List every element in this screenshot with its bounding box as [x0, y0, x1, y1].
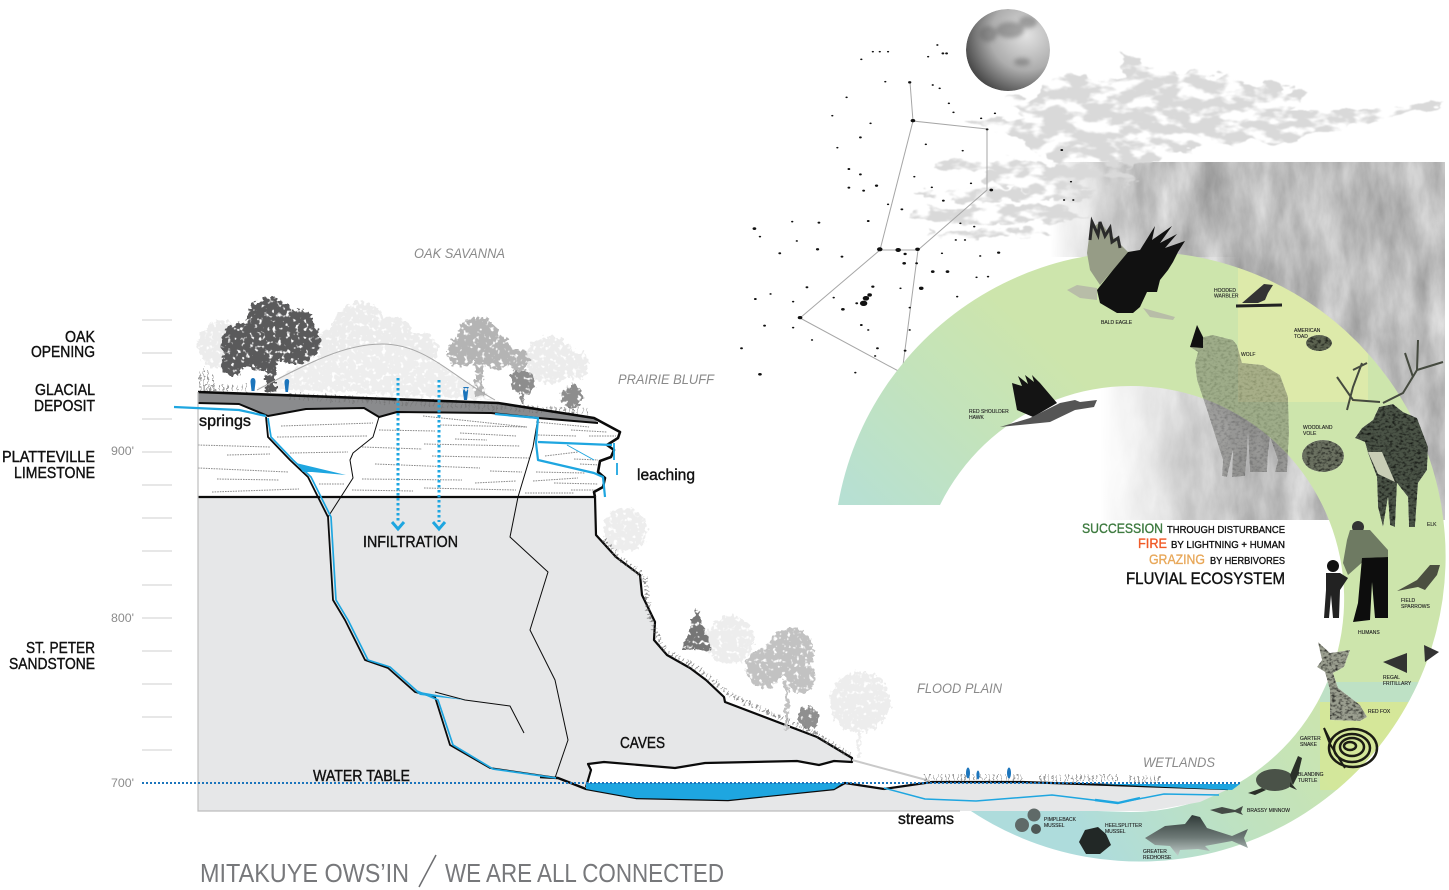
animal: woodland vole	[1302, 425, 1344, 472]
animal: garter snake: GARTER	[1300, 736, 1321, 742]
strata labels: OPENING	[31, 344, 95, 361]
animal: elk: ELK	[1427, 522, 1437, 528]
cave lake	[586, 783, 843, 800]
animal: woodland vole: VOLE	[1303, 431, 1317, 437]
animal: woodland vole: WOODLAND	[1303, 425, 1333, 431]
figures: humans: HUMANS	[1358, 630, 1380, 636]
italic landscape labels: WETLANDS	[1143, 754, 1216, 770]
animal: blanding turtle	[1248, 756, 1324, 795]
disturbance text block: BY LIGHTNING + HUMAN	[1171, 539, 1285, 551]
italic landscape labels: PRAIRIE BLUFF	[618, 371, 715, 387]
animal: american toad: AMERICAN	[1294, 328, 1321, 334]
animal: red shoulder hawk: RED SHOULDER	[969, 409, 1009, 415]
elevation labels: 800'	[111, 611, 134, 625]
animal: wolf: WOLF	[1241, 352, 1255, 358]
title: MITAKUYE OWS’IN	[200, 858, 409, 888]
italic landscape labels: FLOOD PLAIN	[917, 680, 1003, 696]
strata labels: PLATTEVILLE	[2, 449, 95, 466]
wetland grass	[925, 777, 1160, 780]
animal: wolf	[1190, 325, 1289, 477]
left edge of section	[198, 392, 960, 811]
italic landscape labels	[414, 245, 1216, 770]
elevation labels	[111, 444, 134, 790]
animal: red fox	[1317, 642, 1391, 721]
limestone hatching	[198, 416, 616, 493]
animal: greater redhorse: GREATER	[1143, 849, 1167, 855]
diagram annotations	[199, 413, 954, 828]
disturbance text block: GRAZING	[1149, 551, 1205, 567]
grass on bluff	[200, 368, 590, 412]
strata labels: DEPOSIT	[34, 398, 95, 415]
constellation stars	[740, 44, 1074, 393]
strata labels: OAK	[65, 329, 96, 346]
disturbance text block: FLUVIAL ECOSYSTEM	[1126, 569, 1285, 588]
animal: regal fritillary: FRITILLARY	[1383, 681, 1412, 687]
strata labels: LIMESTONE	[14, 465, 95, 482]
animal: hooded warbler: HOODED	[1214, 288, 1236, 294]
animal: brassy minnow	[1210, 806, 1290, 815]
animal: brassy minnow: BRASSY MINNOW	[1247, 808, 1290, 814]
clouds	[910, 50, 1445, 237]
flood plain slope	[852, 760, 930, 781]
diagram annotations: streams	[898, 811, 954, 828]
disturbance text block: THROUGH DISTURBANCE	[1167, 524, 1285, 536]
animal: greater redhorse	[1143, 815, 1248, 861]
diagram annotations: INFILTRATION	[363, 534, 458, 551]
cross-section: sandstone body	[198, 497, 1233, 811]
oak savanna trees	[198, 298, 589, 414]
animal: american toad: TOAD	[1294, 334, 1308, 340]
animal: field sparrow: SPARROWS	[1401, 604, 1430, 610]
title: WE ARE ALL CONNECTED	[445, 858, 724, 888]
disturbance text block: BY HERBIVORES	[1210, 555, 1285, 567]
diagram annotations: CAVES	[620, 735, 665, 752]
animal: heelsplitter mussel: HEELSPLITTER	[1105, 823, 1142, 829]
cross-section black outlines	[198, 392, 1228, 800]
title	[200, 855, 724, 888]
moon	[966, 9, 1050, 91]
strata labels: SANDSTONE	[9, 656, 95, 673]
panel: ecosystem ring band	[838, 252, 1446, 862]
animal: pimpleback mussel	[1015, 808, 1077, 834]
diagram annotations: leaching	[637, 467, 695, 484]
cliff grass	[604, 540, 850, 755]
strata labels	[2, 329, 96, 673]
glacial hill outline	[257, 344, 495, 400]
strata labels: ST. PETER	[26, 640, 95, 657]
strata labels: GLACIAL	[35, 382, 95, 399]
animal: pimpleback mussel: MUSSEL	[1044, 823, 1065, 829]
animal: red fox: RED FOX	[1368, 709, 1391, 715]
animal: blanding turtle: TURTLE	[1298, 778, 1318, 784]
water table dotted line	[142, 782, 1240, 784]
infiltration arrows	[392, 378, 445, 529]
animal: field sparrow	[1397, 565, 1440, 610]
animal: regal fritillary	[1383, 645, 1439, 687]
disturbance text block	[1082, 520, 1285, 588]
animal: pimpleback mussel: PIMPLEBACK	[1044, 817, 1077, 823]
animal: heelsplitter mussel	[1079, 823, 1142, 854]
animal: elk	[1337, 340, 1443, 528]
hillside trees	[603, 508, 890, 757]
animal: american toad	[1294, 328, 1332, 351]
groundwater paths in blue	[174, 407, 1219, 803]
diagram annotations: springs	[199, 413, 251, 430]
animal: field sparrow: FIELD	[1401, 598, 1416, 604]
animal: blanding turtle: BLANDING	[1298, 772, 1324, 778]
animal: bald eagle: BALD EAGLE	[1101, 320, 1133, 326]
glacial deposit layer	[198, 392, 598, 423]
wetland visitors	[966, 768, 1011, 780]
figures: humans	[1324, 521, 1388, 636]
constellation lines	[800, 82, 987, 373]
animal: garter snake: SNAKE	[1300, 742, 1318, 748]
disturbance text block: SUCCESSION	[1082, 520, 1163, 536]
animal: red shoulder hawk	[969, 375, 1097, 427]
photo background: bark texture	[1040, 162, 1445, 520]
animal: regal fritillary: REGAL	[1383, 675, 1400, 681]
disturbance text block: FIRE	[1138, 535, 1167, 551]
diagram annotations: WATER TABLE	[313, 768, 410, 785]
animal: bald eagle	[1067, 222, 1185, 326]
italic landscape labels: OAK SAVANNA	[414, 245, 505, 261]
elevation labels: 900'	[111, 444, 134, 458]
visitors on the bluff	[250, 378, 469, 400]
cross-section: limestone layer	[198, 392, 620, 497]
animal: garter snake	[1300, 728, 1377, 768]
animal: hooded warbler: WARBLER	[1214, 294, 1239, 300]
elevation labels: 700'	[111, 776, 134, 790]
blue wedges	[296, 463, 1240, 790]
elevation ticks	[142, 320, 172, 750]
animal: greater redhorse: REDHORSE	[1143, 855, 1172, 861]
animal: heelsplitter mussel: MUSSEL	[1105, 829, 1126, 835]
animal: red shoulder hawk: HAWK	[969, 415, 984, 421]
animal: hooded warbler	[1214, 284, 1282, 306]
